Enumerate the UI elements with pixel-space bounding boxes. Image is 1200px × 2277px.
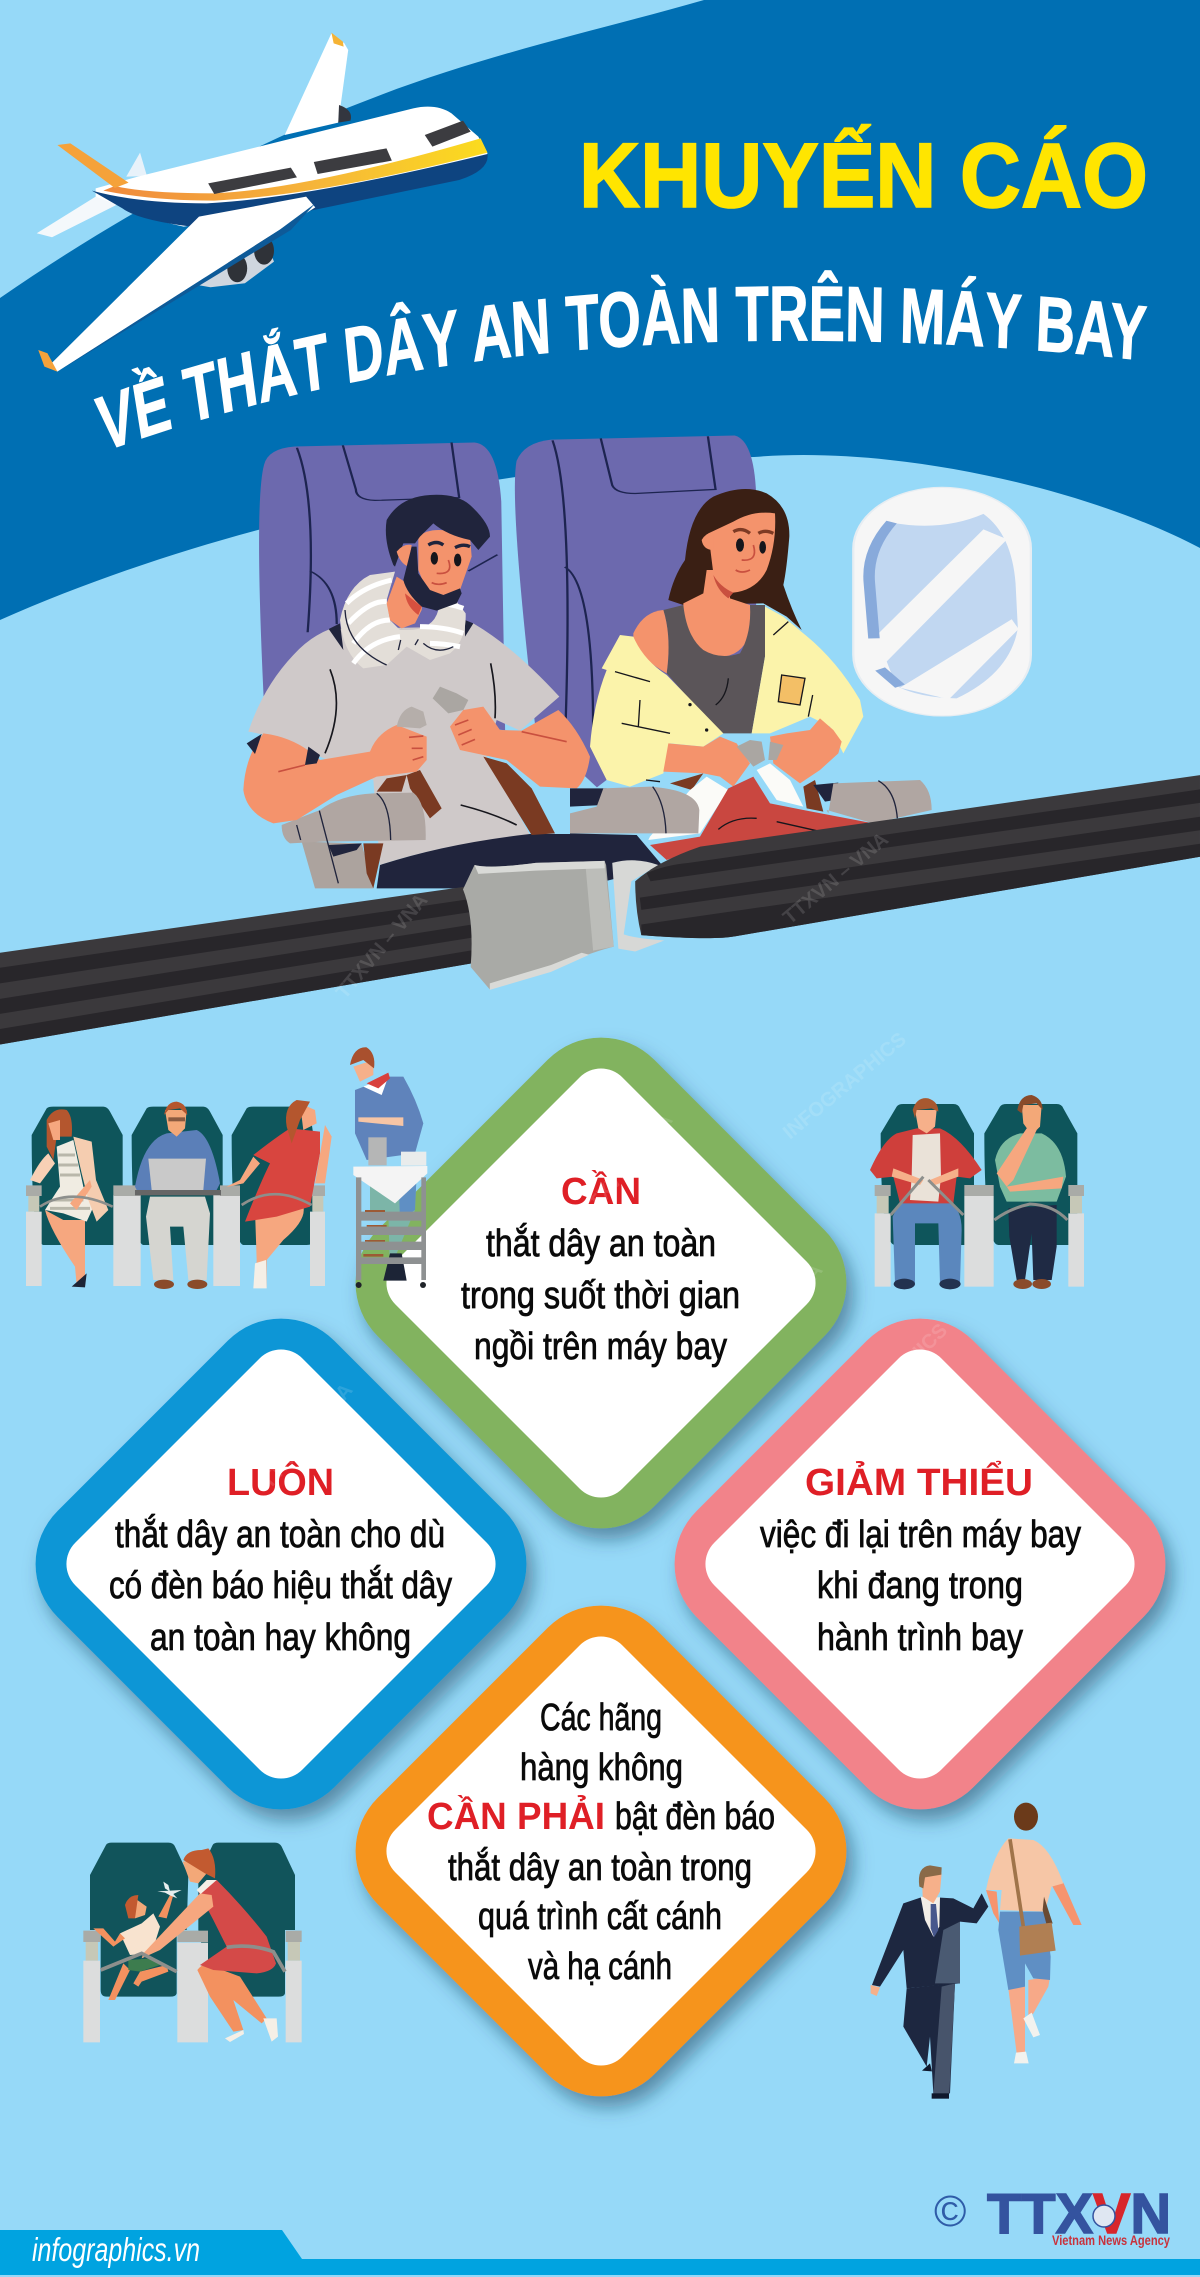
wordmark: TTXVN bbox=[987, 2182, 1171, 2246]
text block: CẦN: trong suốt thời gian bbox=[461, 1275, 740, 1317]
illustration: window bbox=[853, 487, 1031, 716]
copyright symbol: © bbox=[934, 2187, 966, 2236]
seats bbox=[90, 1843, 295, 1997]
text block: LUÔN: thắt dây an toàn cho dù bbox=[115, 1513, 445, 1556]
text block: GIẢM THIỂU: khi đang trong bbox=[817, 1565, 1023, 1607]
woman in stripes bbox=[30, 1109, 113, 1287]
woman bbox=[570, 489, 932, 890]
panel: orange diamond bbox=[325, 1575, 877, 2127]
mother bbox=[142, 1848, 278, 2042]
seat lines bbox=[297, 436, 716, 747]
globe bbox=[1093, 2205, 1115, 2227]
illustration: passengers fastening seat belts bbox=[243, 436, 932, 890]
man from behind bbox=[986, 1803, 1082, 2063]
text block: GIẢM THIỂU: việc đi lại trên máy bay bbox=[760, 1514, 1081, 1556]
panel: green diamond bbox=[325, 1007, 877, 1559]
text block: GIẢM THIỂU: GIẢM THIỂU bbox=[805, 1459, 1033, 1504]
seats bbox=[32, 1107, 313, 1245]
man with laptop bbox=[135, 1102, 221, 1289]
illustration: two men walking bbox=[871, 1803, 1082, 2099]
text block: LUÔN: có đèn báo hiệu thắt dây bbox=[109, 1564, 452, 1607]
agency name: Vietnam News Agency bbox=[1052, 2232, 1170, 2248]
seat posts bbox=[83, 1943, 302, 2042]
title: KHUYẾN CÁO: KHUYẾN CÁO bbox=[579, 124, 1148, 227]
illustration: airplane bbox=[37, 33, 488, 372]
man in red jacket bbox=[870, 1098, 982, 1289]
text block: CẦN: thắt dây an toàn bbox=[486, 1222, 716, 1265]
illustration: three passengers bbox=[26, 1100, 332, 1289]
text block: LUÔN: an toàn hay không bbox=[150, 1617, 411, 1659]
text block: CẦN bbox=[461, 1169, 740, 1368]
logo: copyright and TTXVN bbox=[934, 2182, 1171, 2248]
text block: CẦN PHẢI: quá trình cất cánh bbox=[478, 1896, 722, 1938]
seat posts bbox=[875, 1196, 1084, 1287]
text block: CẦN PHẢI bbox=[427, 1697, 775, 1988]
man bbox=[243, 495, 590, 888]
illustration: flight attendant with trolley bbox=[350, 1047, 427, 1288]
man in suit bbox=[871, 1865, 988, 2099]
strap: right bbox=[635, 775, 1200, 938]
seats bbox=[881, 1104, 1077, 1245]
buckle body bbox=[463, 861, 614, 989]
blue header band bbox=[0, 0, 1200, 620]
text block: GIẢM THIỂU bbox=[760, 1459, 1081, 1659]
text block: LUÔN bbox=[109, 1459, 452, 1659]
illustration: two seated men bbox=[870, 1095, 1084, 1289]
text block: CẦN PHẢI: và hạ cánh bbox=[528, 1946, 672, 1988]
illustration: mother and child bbox=[83, 1843, 302, 2042]
man in green shirt bbox=[994, 1095, 1067, 1289]
strap: left bbox=[0, 885, 474, 1045]
text block: CẦN PHẢI: hàng không bbox=[520, 1747, 683, 1789]
text block: CẦN PHẢI: thắt dây an toàn trong bbox=[448, 1846, 752, 1889]
seat: right bbox=[515, 436, 756, 787]
watermarks: TTXVN – VNA bbox=[779, 828, 893, 929]
text block: CẦN: CẦN bbox=[561, 1169, 641, 1213]
watermarks: TTXVN – VNA bbox=[577, 1109, 677, 1223]
watermarks: INFOGRAPHICS bbox=[779, 1028, 911, 1144]
title: curved subtitle: VỀ THẮT DÂY AN TOÀN TRÊN MÁY BAY bbox=[94, 270, 1148, 448]
text block: CẦN PHẢI: bật đèn báo bbox=[615, 1796, 775, 1838]
text block: LUÔN: LUÔN bbox=[227, 1459, 334, 1504]
text block: GIẢM THIỂU: hành trình bay bbox=[817, 1617, 1023, 1659]
text block: CẦN PHẢI: CẦN PHẢI bbox=[427, 1794, 605, 1838]
panel: pink diamond bbox=[644, 1288, 1196, 1840]
watermarks: TTXVN – VNA bbox=[727, 1259, 827, 1373]
watermarks bbox=[257, 828, 952, 1493]
text block: CẦN: ngồi trên máy bay bbox=[474, 1326, 727, 1368]
footer text: infographics.vn bbox=[32, 2231, 200, 2268]
watermarks: TTXVN – VNA bbox=[257, 1379, 357, 1493]
seat: left bbox=[259, 442, 505, 730]
buckle tongue bbox=[612, 860, 664, 951]
footer band bbox=[0, 2230, 1200, 2275]
seat belt and buckle bbox=[0, 775, 1200, 1045]
seat posts bbox=[26, 1195, 325, 1286]
woman in red bbox=[227, 1100, 332, 1288]
belts bbox=[101, 1946, 285, 1972]
child bbox=[93, 1882, 182, 2000]
watermarks: INFOGRAPHICS bbox=[828, 1320, 952, 1444]
panel: blue diamond bbox=[5, 1288, 557, 1840]
text block: CẦN PHẢI: Các hãng bbox=[540, 1697, 662, 1739]
watermarks: TTXVN – VNA bbox=[332, 889, 432, 1003]
